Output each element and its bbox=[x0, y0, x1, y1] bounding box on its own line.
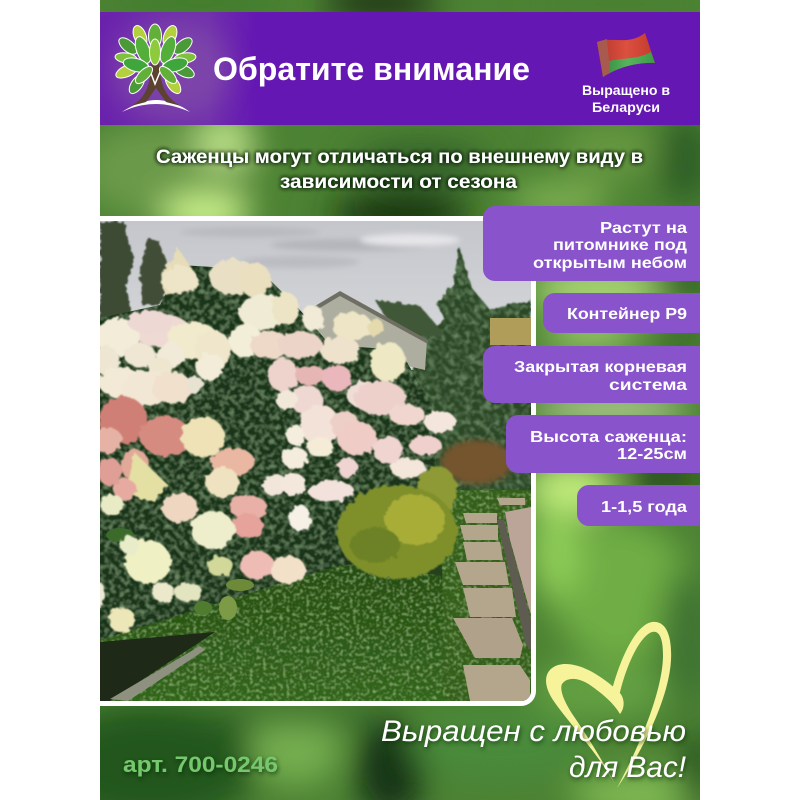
header band bbox=[100, 12, 700, 125]
pill: container P9: Контейнер Р9 bbox=[567, 306, 687, 323]
logo: tree bbox=[114, 24, 197, 112]
flower clusters bbox=[91, 248, 456, 633]
pill: closed root system: Закрытая корневая bbox=[514, 359, 687, 376]
lawn bbox=[100, 565, 475, 701]
house bbox=[310, 291, 531, 370]
badge text: grown in Belarus bbox=[582, 82, 670, 115]
pill: closed root system bbox=[483, 346, 700, 403]
subtitle: зависимости от сезона bbox=[280, 172, 517, 193]
slogan: для Вас! bbox=[569, 751, 687, 784]
pill: container P9 bbox=[543, 293, 700, 333]
stepping stones bbox=[453, 498, 530, 701]
pill: grown outdoors bbox=[483, 206, 700, 281]
article number: арт. 700-0246 bbox=[123, 752, 278, 777]
dark bush mass bbox=[100, 265, 440, 650]
pill: seedling height: Высота саженца: bbox=[530, 429, 687, 446]
subtitle: Саженцы могут отличаться по внешнему виду в bbox=[156, 147, 643, 168]
pill: grown outdoors: Растут на bbox=[600, 220, 687, 237]
pill: age: 1-1,5 года bbox=[601, 499, 687, 516]
header title: Обратите внимание bbox=[213, 51, 530, 87]
icon: Belarus flag bbox=[597, 33, 655, 77]
slogan: Выращен с любовью bbox=[381, 715, 686, 748]
slogan bbox=[381, 715, 687, 784]
green bokeh background panel bbox=[100, 0, 700, 800]
photo frame bbox=[100, 216, 536, 706]
badge text: grown in Belarus: Выращено в bbox=[582, 82, 670, 98]
subtitle bbox=[156, 147, 643, 193]
pill: seedling height: 12-25см bbox=[617, 446, 687, 463]
green leaves bbox=[106, 528, 254, 620]
pill: seedling height bbox=[506, 415, 700, 473]
sky bbox=[100, 221, 531, 371]
pill: grown outdoors: открытым небом bbox=[533, 255, 687, 272]
golden round shrub bbox=[337, 466, 457, 579]
infographic canvas bbox=[100, 0, 700, 800]
photo: hydrangea garden bbox=[91, 221, 531, 701]
pill: closed root system: система bbox=[609, 377, 687, 394]
icon: yellow heart bbox=[546, 622, 671, 788]
pill: grown outdoors: питомнике под bbox=[553, 237, 687, 254]
background trees bbox=[100, 222, 531, 500]
pill: age bbox=[577, 485, 700, 526]
badge text: grown in Belarus: Беларуси bbox=[592, 99, 660, 115]
gravel border bbox=[505, 507, 531, 615]
orange shrub bbox=[441, 440, 513, 484]
